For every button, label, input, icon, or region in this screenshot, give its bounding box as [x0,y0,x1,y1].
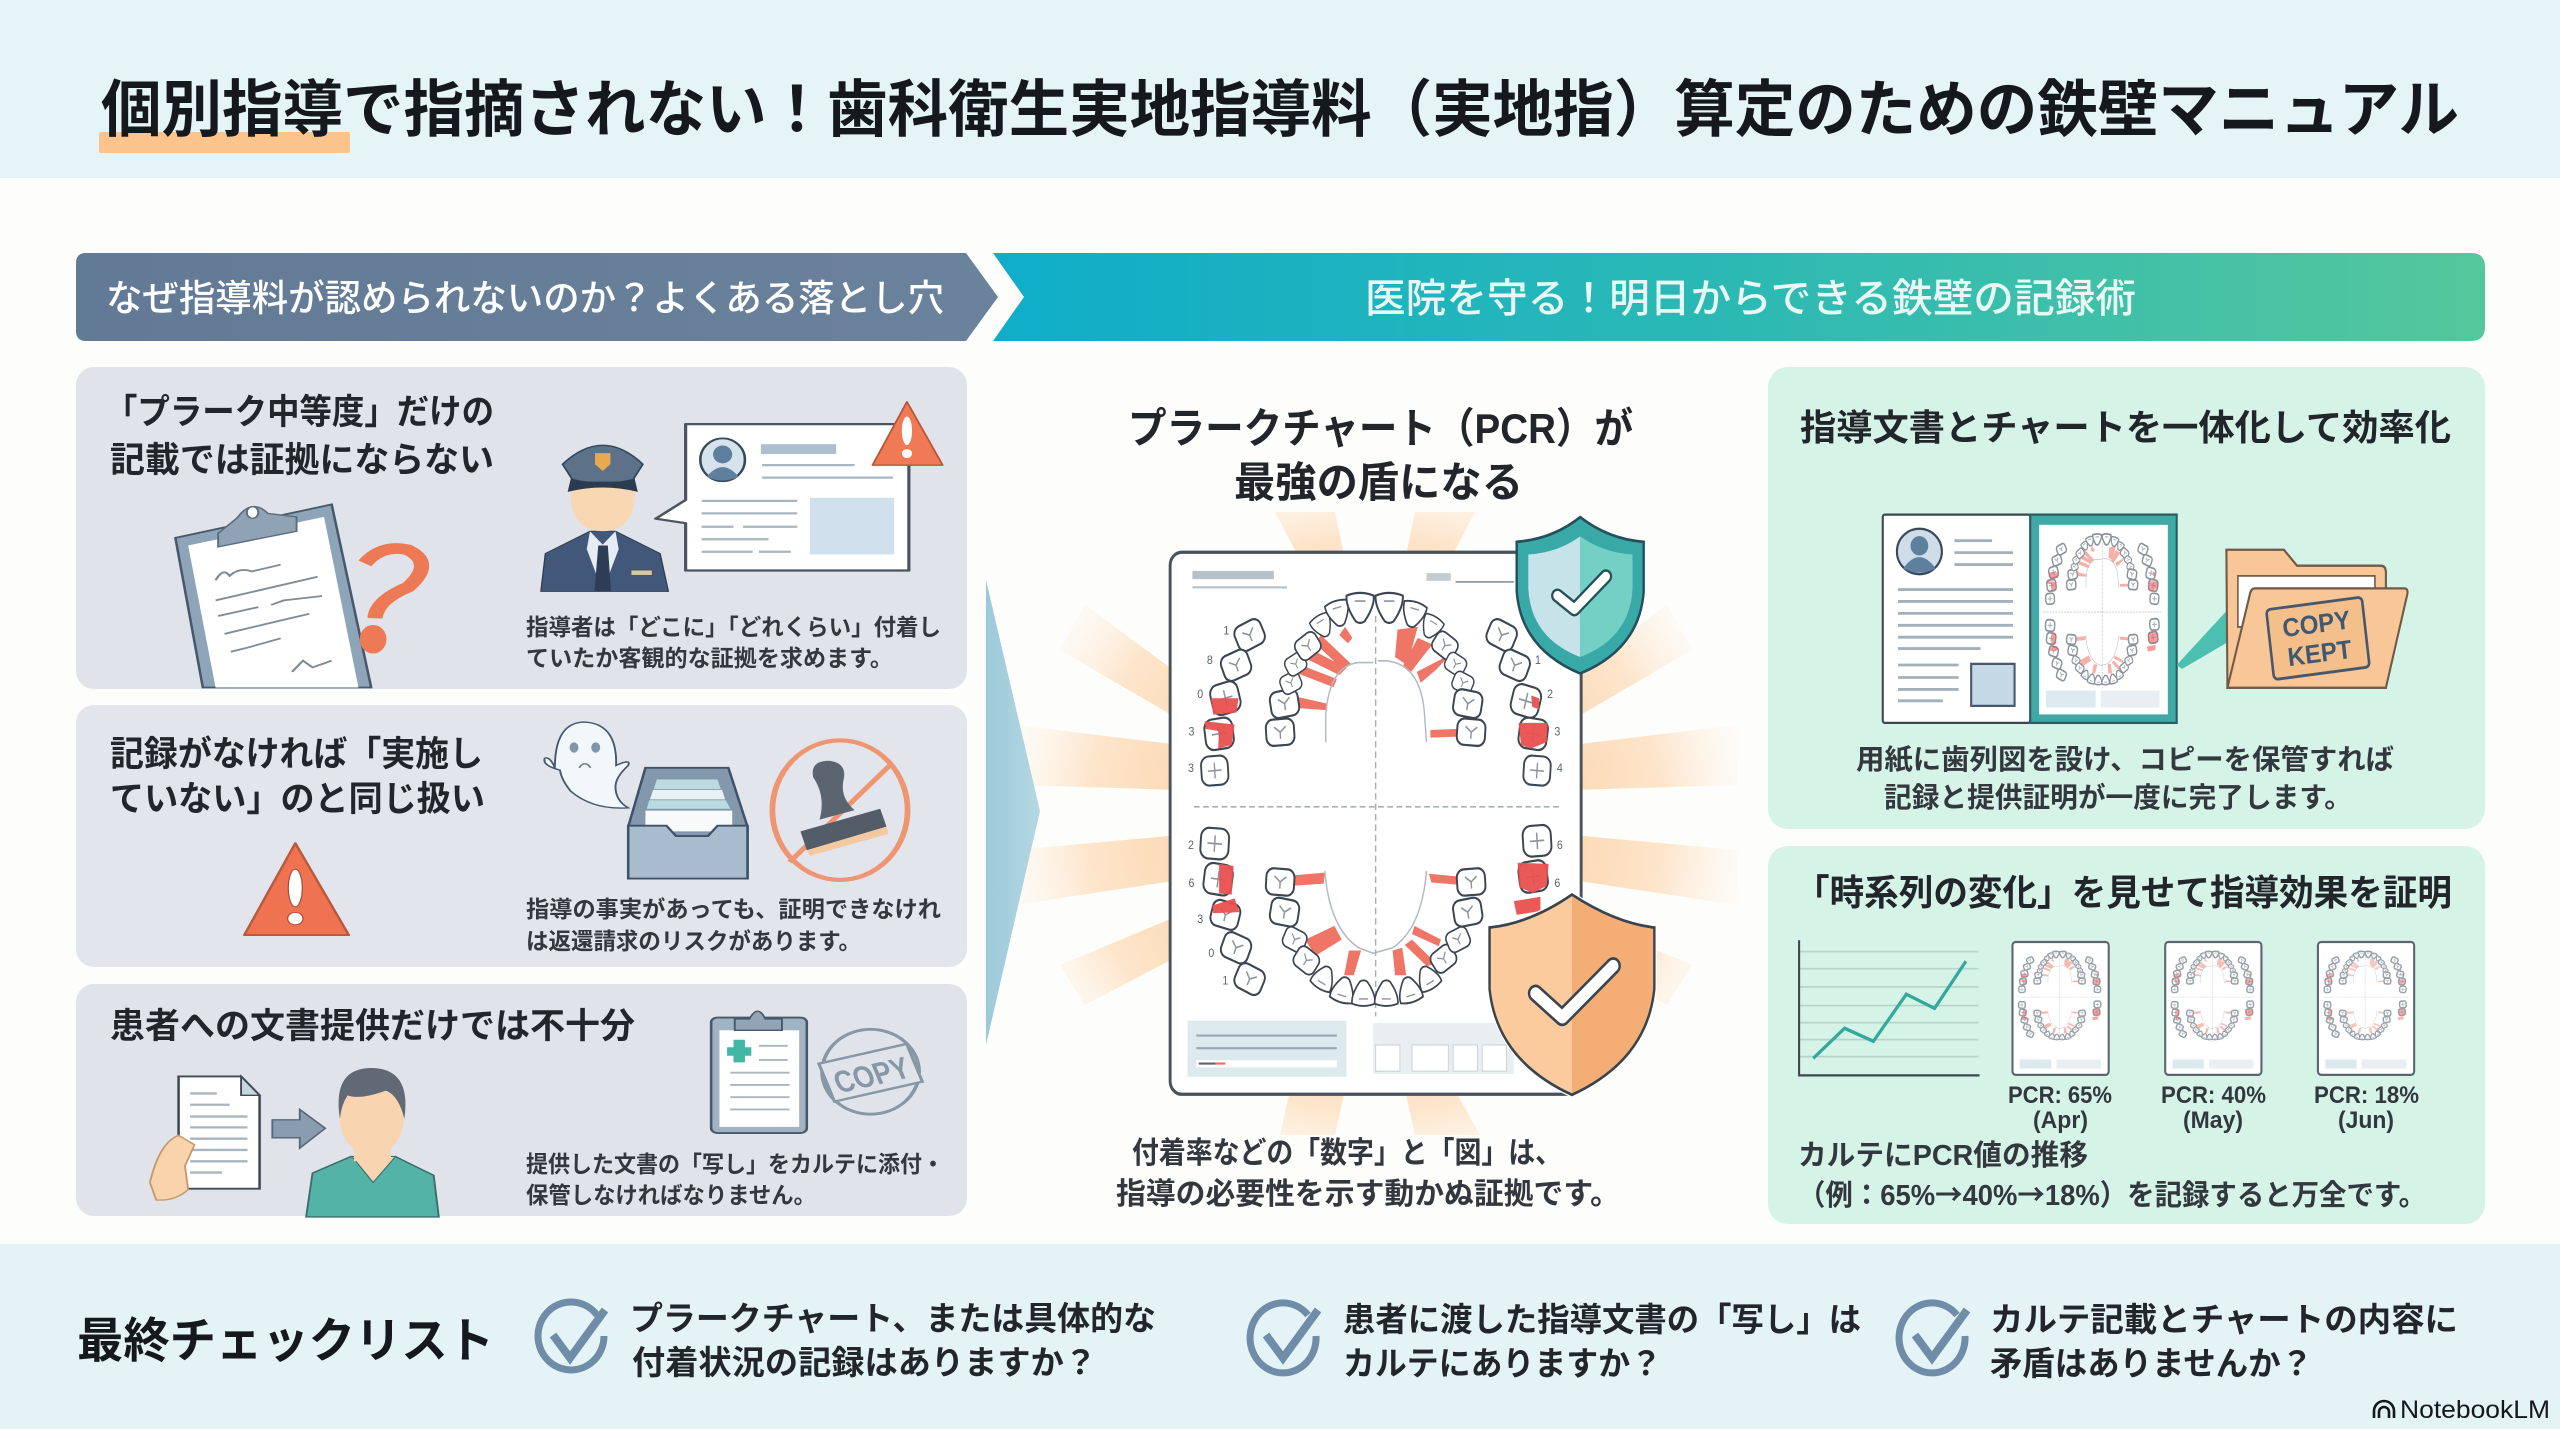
body text: は返還請求のリスクがあります。 [526,928,861,954]
tooth numbers [1188,625,1563,988]
tooth numbers: 3 [1188,763,1194,775]
tooth numbers: 2 [1547,689,1553,701]
big arrow connecting problems to solutions [986,580,1040,1045]
centre column: plaque chart shield [1015,405,1737,1211]
caption: 指導の必要性を示す動かぬ証拠です。 [1116,1178,1620,1211]
tooth numbers: 6 [1188,877,1194,890]
section header: pitfalls [76,253,998,341]
body text: 指導の事実があっても、証明できなけれ [526,896,941,922]
tooth numbers: 6 [1554,877,1560,890]
body text: 指導者は「どこに」「どれくらい」付着し [526,614,941,640]
panel: handing documents alone is not enough [76,984,967,1217]
icon: inspector with speech bubble [541,402,943,591]
PCR thumbnail: May [2165,942,2261,1075]
tooth numbers: 3 [1554,726,1560,739]
tooth numbers: 0 [1197,689,1203,701]
body text: ていたか客観的な証拠を求めます。 [526,645,893,671]
panel: show change over time [1768,846,2485,1224]
checklist title: 最終チェックリスト [77,1315,494,1368]
body text: カルテにPCR値の推移 [1798,1139,2088,1172]
icon: COPY stamp: COPY [828,1050,915,1100]
body text [526,896,941,954]
tooth numbers: 0 [1208,948,1214,960]
heading [110,735,485,819]
body text: 記録と提供証明が一度に完了します。 [1884,781,2352,813]
title highlight [99,132,350,153]
heading: ていない」のと同じ扱い [110,780,485,819]
panel: plaque moderate is not evidence [76,367,967,689]
check item 2: 患者に渡した指導文書の「写し」は [1343,1301,1861,1338]
body text: 保管しなければなりません。 [526,1182,816,1208]
footer checklist band [0,1244,2560,1429]
icon: link wedge [2177,610,2227,669]
PCR labels: (May) [2183,1107,2243,1134]
check item 2 [1250,1301,1861,1382]
icon: warning triangle [244,843,349,935]
check item 3: カルテ記載とチャートの内容に [1990,1301,2458,1338]
body text: （例：65%→40%→18%）を記録すると万全です。 [1798,1172,2426,1214]
section header: record keeping [993,253,2485,341]
icon: folder with copy kept stamp: KEPT [2286,635,2354,672]
PCR thumbnail: April [2012,942,2109,1075]
body text: 提供した文書の「写し」をカルテに添付・ [526,1151,944,1177]
panel: no record means not performed [76,705,967,967]
icon: COPY stamp [819,1029,922,1114]
icon: teal shield [1517,517,1644,674]
check item 1 [538,1300,1156,1381]
tooth numbers: 8 [1207,655,1213,667]
PCR labels: (Apr) [2033,1107,2088,1134]
icon: folder with copy kept stamp [2226,550,2408,688]
heading: 「プラーク中等度」だけの [105,393,494,432]
heading: プラークチャート（PCR）が [1128,405,1633,452]
heading: 記録がなければ「実施し [110,735,483,774]
tooth numbers: 2 [1188,840,1194,852]
heading: 記載では証拠にならない [110,441,494,480]
line chart [1799,940,1980,1075]
check item 3: 矛盾はありませんか？ [1990,1345,2313,1382]
tooth numbers: 4 [1557,763,1563,775]
check item 1: プラークチャート、または具体的な [630,1300,1156,1337]
icon: clipboard with question mark [175,504,422,687]
body text [1798,1139,2426,1214]
plaque chart card [1170,552,1581,1094]
icon: orange shield [1490,895,1654,1095]
body text: 用紙に歯列図を設け、コピーを保管すれば [1856,744,2394,775]
body text [526,614,941,671]
heading [105,393,494,480]
tooth numbers: 1 [1222,975,1228,988]
heading: 「時系列の変化」を見せて指導効果を証明 [1795,872,2452,913]
caption [1116,1137,1620,1211]
check item 2: カルテにありますか？ [1343,1345,1662,1382]
tooth numbers: 3 [1197,914,1203,926]
heading [1128,405,1633,506]
heading: 最強の盾になる [1234,459,1523,506]
PCR labels [2008,1082,2419,1134]
radiating rays [1015,512,1737,1135]
title: 個別指導で指摘されない！歯科衛生実地指導料（実地指）算定のための鉄壁マニュアル [101,76,2459,145]
icon: chart clipboard [711,1011,807,1133]
section header: pitfalls: なぜ指導料が認められないのか？よくある落とし穴 [106,278,944,319]
icon: hand holding document [150,1076,260,1200]
PCR labels: (Jun) [2338,1107,2394,1134]
icon: folder with copy kept stamp: COPY [2281,605,2352,643]
icon: arrow to patient [272,1109,325,1148]
NotebookLM mark: NotebookLM [2400,1396,2550,1424]
tooth numbers: 1 [1535,655,1541,667]
PCR labels: PCR: 65% [2008,1082,2112,1109]
body text [1856,744,2394,813]
caption: 付着率などの「数字」と「図」は、 [1132,1137,1562,1170]
check item 1: 付着状況の記録はありますか？ [632,1344,1097,1381]
icon: patient [306,1068,439,1217]
tooth numbers: 1 [1223,625,1229,638]
icon: file drawer [628,768,748,879]
body text [526,1151,944,1208]
PCR labels: PCR: 40% [2161,1082,2266,1109]
icon: prohibited stamp [772,740,908,880]
heading: 患者への文書提供だけでは不十分 [110,1007,635,1046]
icon: ghost [544,722,629,808]
chart footer boxes [1188,1021,1347,1077]
PCR labels: PCR: 18% [2314,1082,2419,1109]
tooth numbers: 6 [1557,840,1563,852]
PCR thumbnail: June [2318,942,2414,1075]
header band with title [0,0,2560,178]
heading: 指導文書とチャートを一体化して効率化 [1800,407,2451,448]
icon: document with integrated chart [1883,515,2177,723]
section header: record keeping: 医院を守る！明日からできる鉄壁の記録術 [1365,277,2136,321]
check item 3 [1899,1301,2458,1382]
tooth numbers: 3 [1188,726,1194,739]
panel: integrate document and chart [1768,367,2485,829]
